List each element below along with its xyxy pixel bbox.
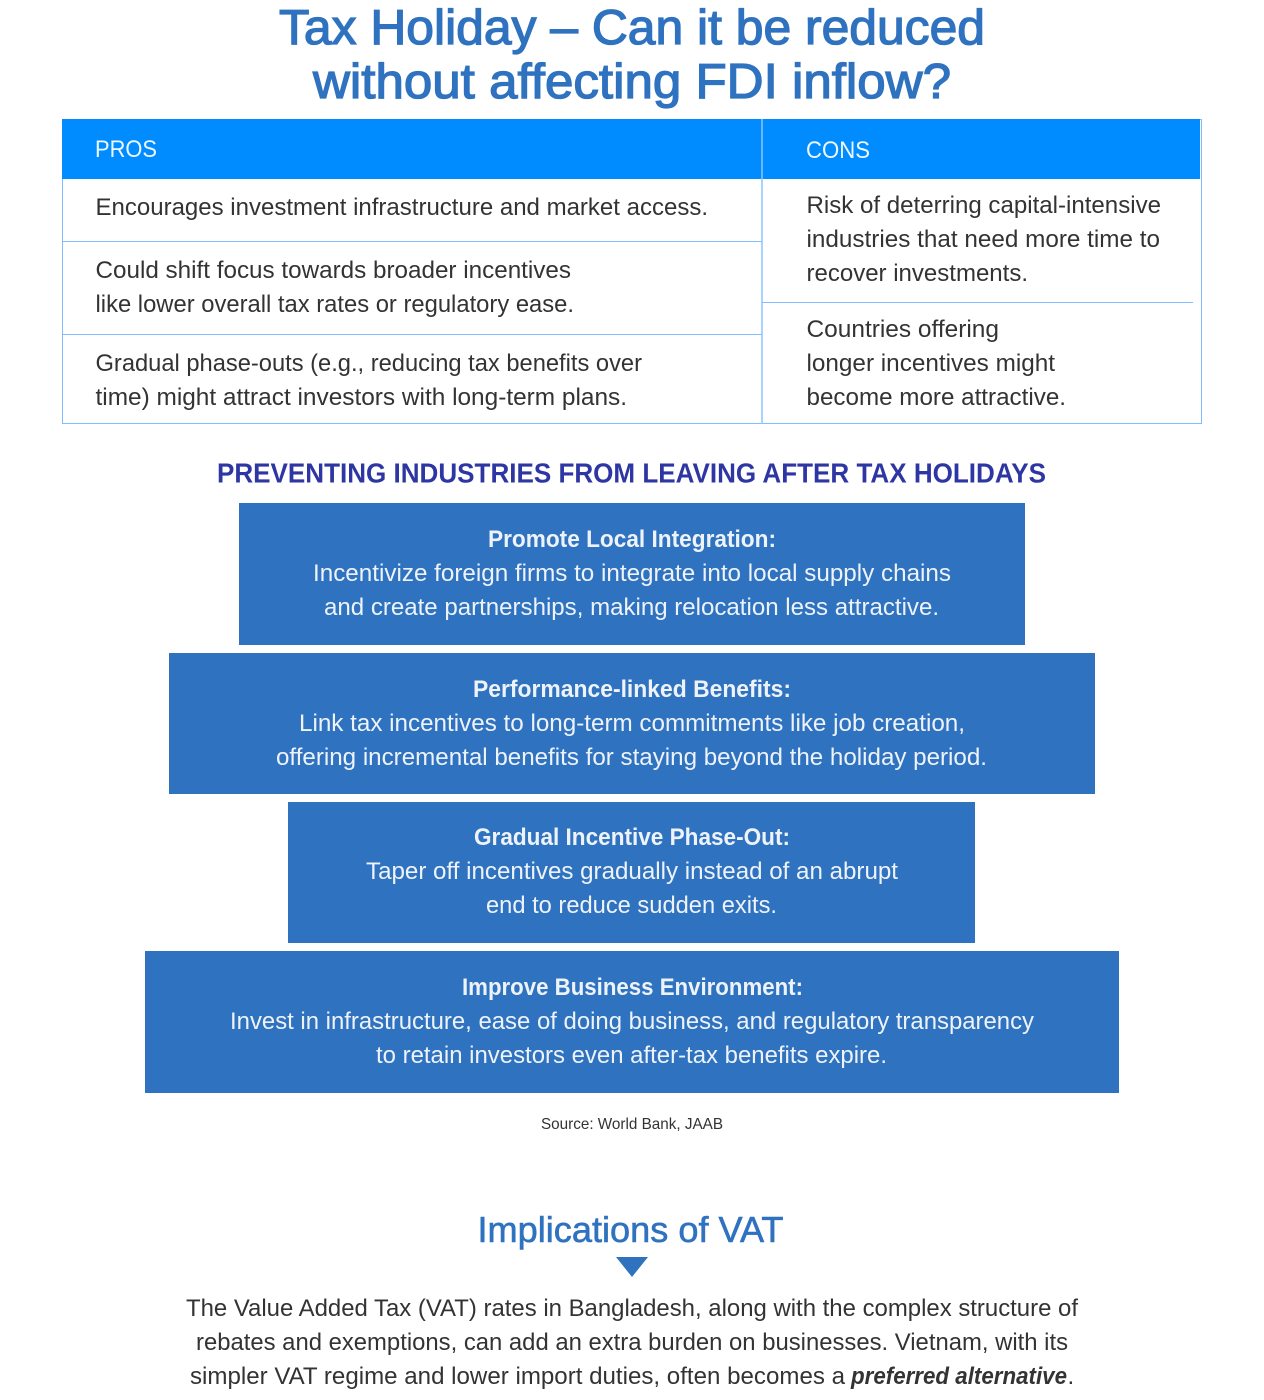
pro item 3	[96, 350, 642, 411]
con item 2: Countries offering	[806, 316, 999, 343]
text block: VAT paragraph: The Value Added Tax (VAT) rates in Bangladesh, along with the complex structure of	[186, 1295, 1078, 1322]
con item 1: recover investments.	[806, 260, 1028, 287]
panel: performance-linked benefits: Link tax incentives to long-term commitments like job creation,	[299, 710, 965, 737]
title	[279, 1, 985, 109]
icon: down triangle	[616, 1257, 648, 1277]
con item 1: Risk of deterring capital-intensive	[806, 192, 1161, 219]
con item 1	[806, 192, 1161, 287]
panel: performance-linked benefits: offering incremental benefits for staying beyond the holiday period.	[276, 744, 987, 771]
title: without affecting FDI inflow?	[312, 55, 951, 109]
panel: gradual incentive phase-out: Gradual Incentive Phase-Out:	[474, 824, 790, 851]
con item 2: become more attractive.	[806, 384, 1066, 411]
text block: VAT paragraph: simpler VAT regime and lower import duties, often becomes a	[190, 1363, 846, 1390]
panel: improve business environment	[145, 951, 1119, 1093]
panel: improve business environment: to retain investors even after-tax benefits expire.	[376, 1042, 887, 1069]
panel: pros and cons table	[62, 119, 1202, 424]
panel: promote local integration	[239, 503, 1025, 645]
panel: improve business environment: Improve Business Environment:	[462, 974, 803, 1001]
panel: gradual incentive phase-out: end to reduce sudden exits.	[486, 892, 777, 919]
source note: Source: World Bank, JAAB	[541, 1116, 723, 1133]
panel: promote local integration: and create partnerships, making relocation less attractive.	[324, 594, 939, 621]
panel: gradual incentive phase-out: Taper off incentives gradually instead of an abrupt	[366, 858, 898, 885]
con item 1: industries that need more time to	[806, 226, 1160, 253]
pro item 1: Encourages investment infrastructure and market access.	[96, 194, 708, 221]
text block: VAT paragraph: rebates and exemptions, can add an extra burden on businesses. Vietnam, with its	[196, 1329, 1068, 1356]
text block: VAT paragraph: preferred alternative	[850, 1363, 1067, 1390]
panel: improve business environment: Invest in infrastructure, ease of doing business, and regulatory transparency	[230, 1008, 1034, 1035]
pro item 3: time) might attract investors with long-term plans.	[96, 384, 627, 411]
panel: performance-linked benefits	[169, 653, 1095, 794]
heading: cons: CONS	[806, 137, 870, 164]
heading: implications of VAT: Implications of VAT	[478, 1209, 784, 1250]
panel: performance-linked benefits: Performance-linked Benefits:	[473, 676, 791, 703]
panel: promote local integration: Promote Local Integration:	[488, 526, 776, 553]
section heading: PREVENTING INDUSTRIES FROM LEAVING AFTER TAX HOLIDAYS	[217, 458, 1046, 488]
con item 2: longer incentives might	[806, 350, 1055, 377]
heading: pros: PROS	[95, 136, 157, 163]
panel: promote local integration: Incentivize foreign firms to integrate into local supply chains	[313, 560, 951, 587]
pro item 3: Gradual phase-outs (e.g., reducing tax benefits over	[96, 350, 642, 377]
text block: VAT paragraph: .	[1068, 1363, 1074, 1390]
panel: gradual incentive phase-out	[288, 802, 975, 943]
con item 2	[806, 316, 1066, 411]
title: Tax Holiday – Can it be reduced	[279, 1, 985, 55]
pro item 2: like lower overall tax rates or regulatory ease.	[96, 291, 574, 318]
pro item 2: Could shift focus towards broader incentives	[96, 257, 571, 284]
text block: VAT paragraph	[186, 1295, 1078, 1390]
pro item 2	[96, 257, 574, 318]
